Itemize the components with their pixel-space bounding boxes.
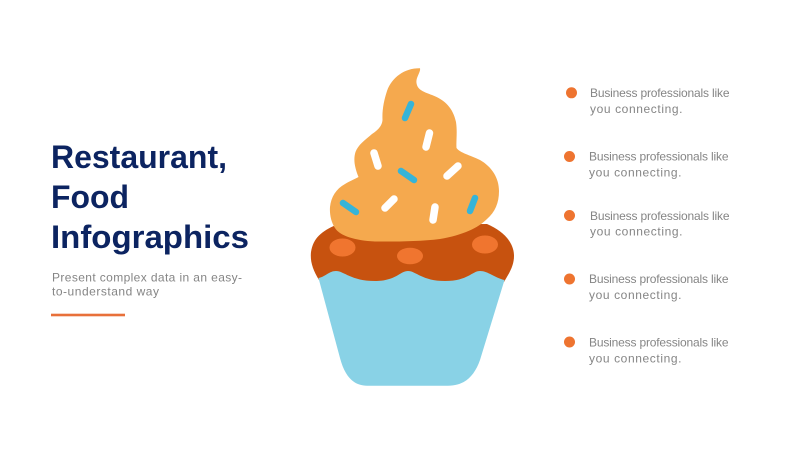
accent line (51, 314, 125, 316)
wrapper (318, 271, 504, 386)
list item 4 (564, 272, 729, 302)
subtitle: to-understand way (52, 284, 159, 298)
subtitle (52, 270, 242, 298)
title: Infographics (51, 219, 249, 255)
list item 3: you connecting. (590, 224, 682, 238)
list item 5: Business professionals like (589, 336, 729, 350)
list item 1 (566, 86, 730, 116)
list item 1: Business professionals like (590, 86, 730, 100)
list item 4: you connecting. (589, 288, 682, 302)
sprinkles: white (374, 133, 458, 220)
cake spots (330, 236, 498, 264)
list item 5: you connecting. (589, 352, 682, 366)
list item 2: Business professionals like (589, 150, 729, 164)
list item 3 (564, 209, 730, 238)
list item 2: you connecting. (589, 166, 682, 180)
title: Food (51, 179, 129, 215)
frosting (330, 68, 499, 242)
list item 1: you connecting. (590, 102, 682, 116)
list item 4: Business professionals like (589, 272, 729, 286)
list item 3: Business professionals like (590, 209, 730, 223)
title (51, 139, 249, 255)
subtitle: Present complex data in an easy- (52, 270, 242, 284)
title: Restaurant, (51, 139, 227, 175)
list item 5 (564, 336, 729, 366)
sprinkles: blue (343, 104, 475, 212)
list item 2 (564, 150, 729, 180)
icon: cupcake (311, 68, 514, 386)
cake top (311, 224, 514, 285)
